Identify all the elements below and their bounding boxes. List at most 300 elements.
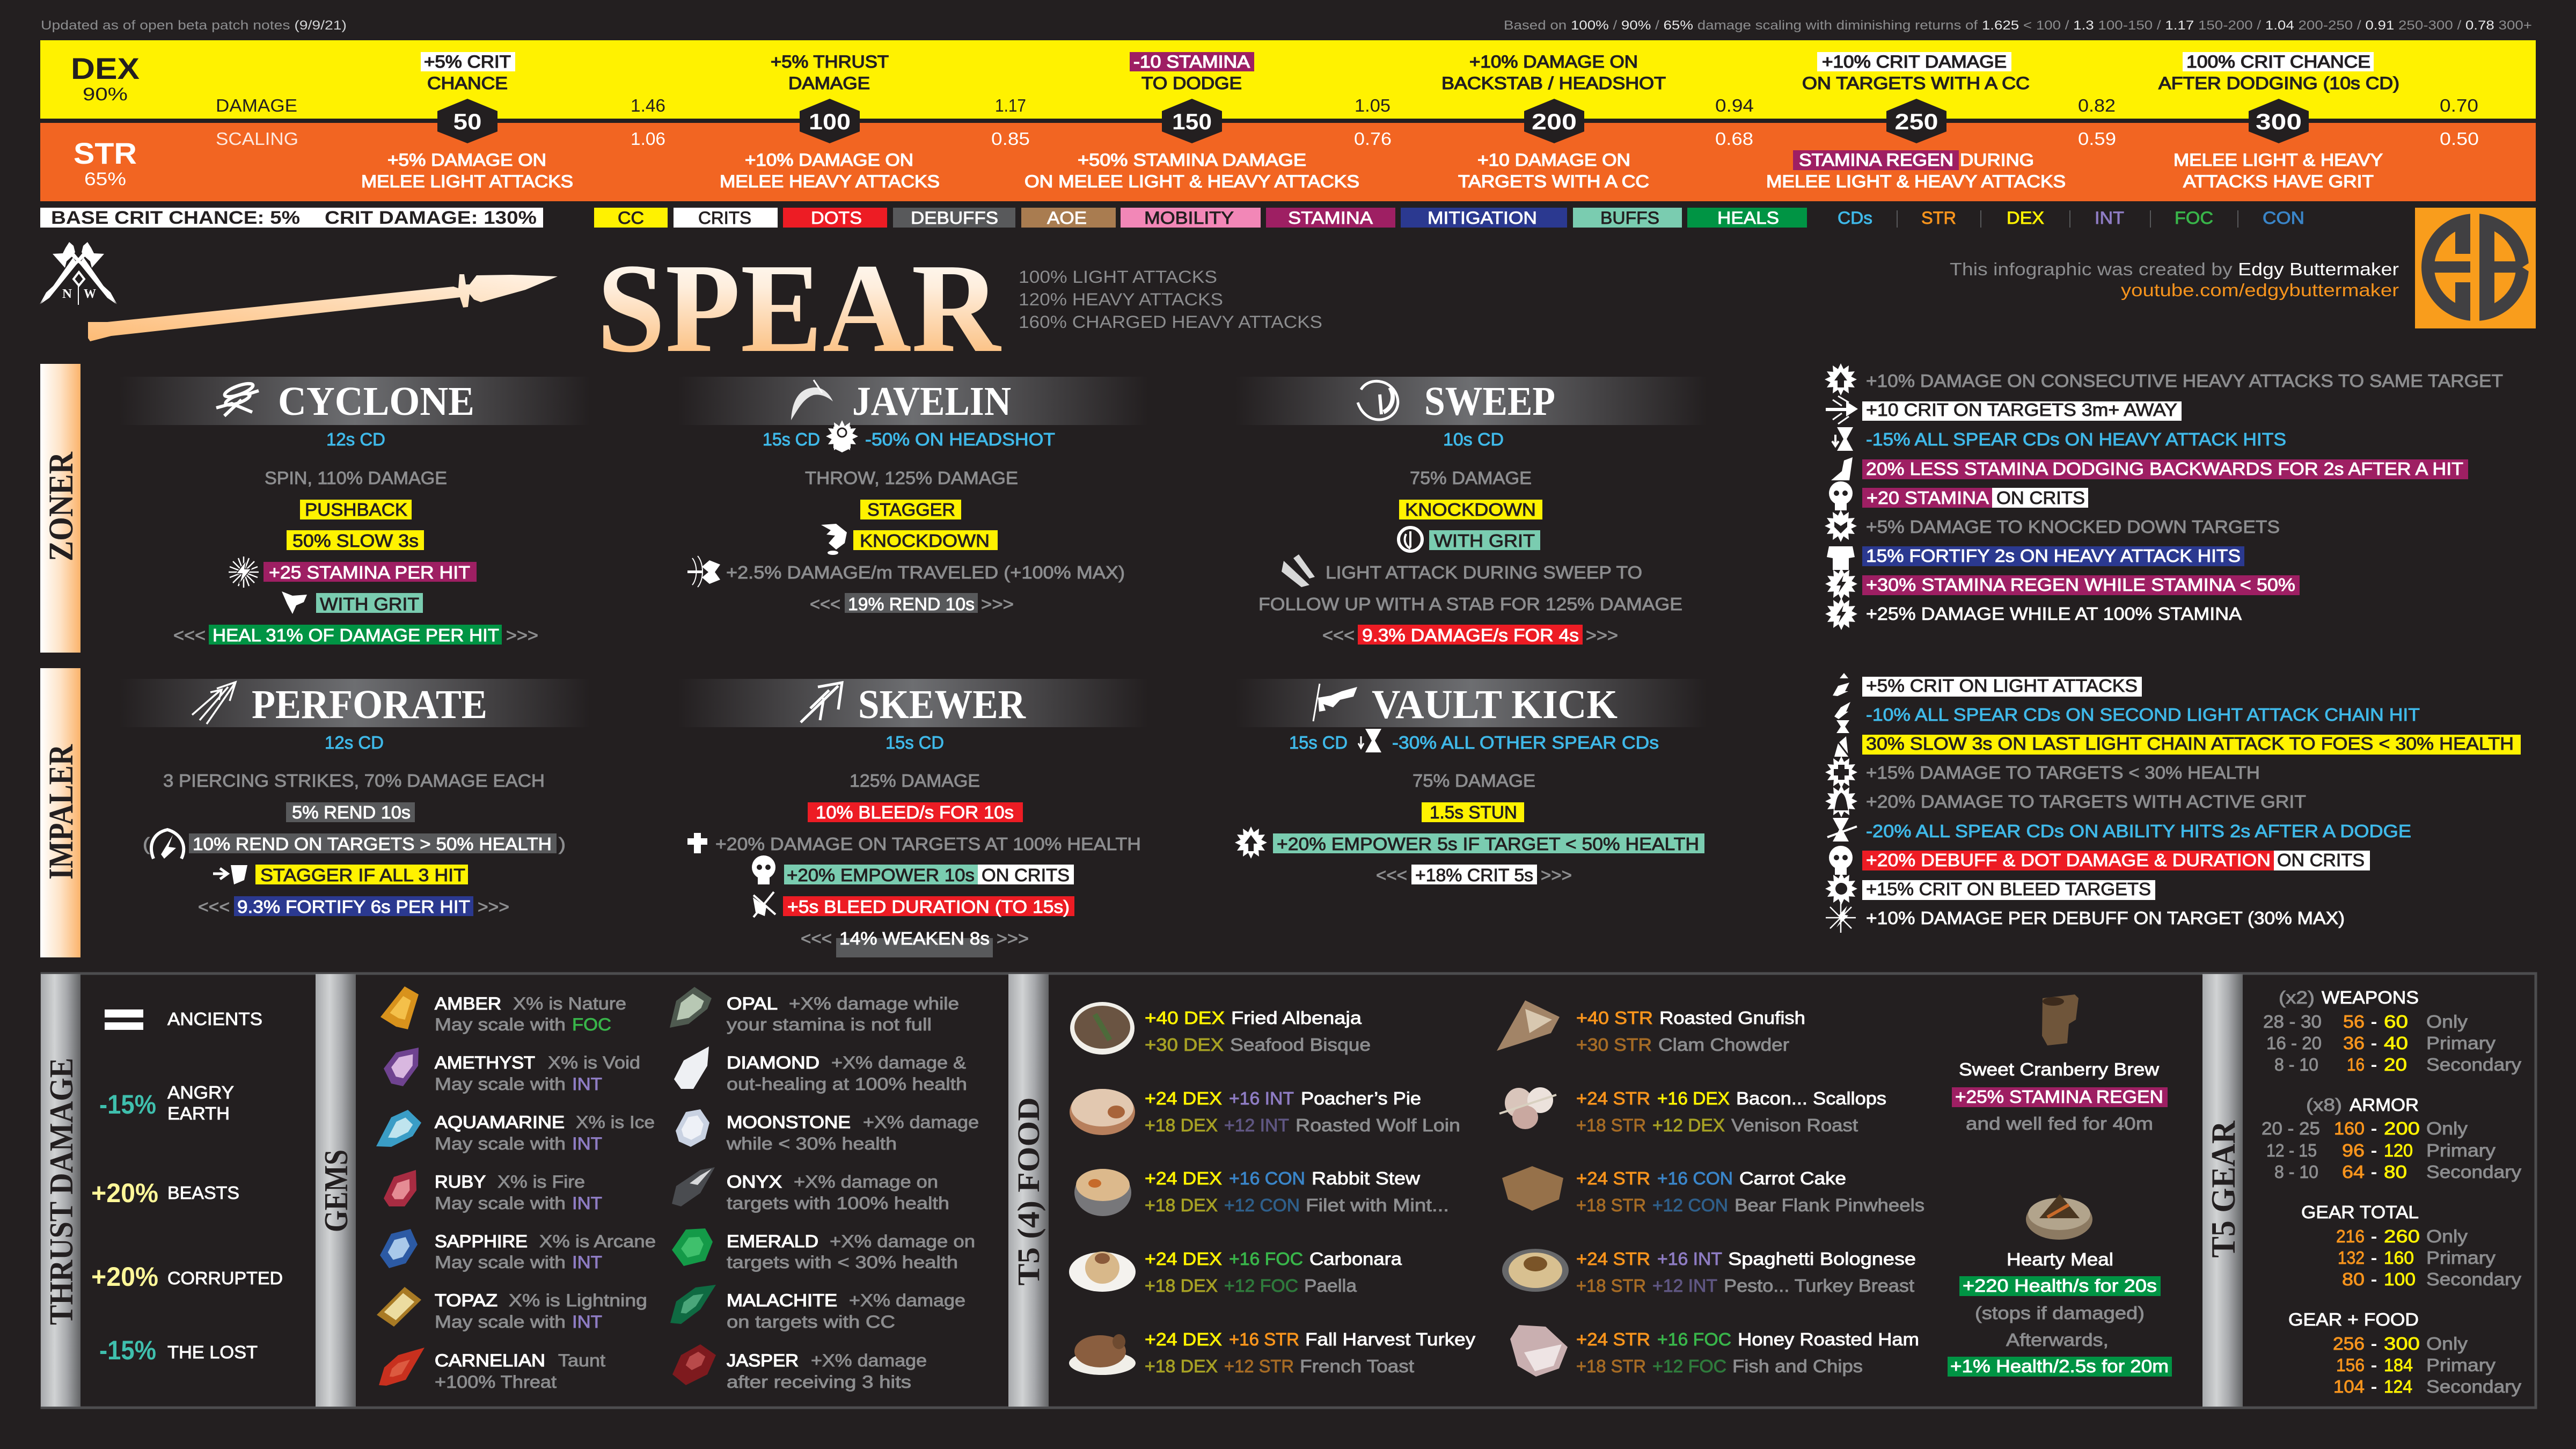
panel: gems [316, 974, 979, 1407]
threshold 300: 300 [2256, 109, 2302, 134]
panel: zoner passives [1825, 363, 2503, 630]
gem: topaz: X% is Lightning [509, 1291, 647, 1310]
passive row [1829, 481, 2088, 510]
gear plus food table: - [2371, 1355, 2377, 1375]
gear total table: - [2371, 1248, 2377, 1268]
side tab: zoner: ZONER [42, 451, 80, 561]
food row: str con: Bear Flank Pinwheels [1735, 1195, 1924, 1215]
gem: emerald [672, 1228, 975, 1272]
gem: sapphire: May scale with [435, 1253, 566, 1272]
food row: str foc: +16 FOC [1657, 1329, 1731, 1349]
gear plus food table: - [2371, 1334, 2377, 1353]
gem: amethyst: X% is Void [548, 1053, 640, 1072]
STR scaling values: 0.50 [2440, 129, 2479, 149]
passive row: -15% ALL SPEAR CDs ON HEAVY ATTACK HITS [1866, 429, 2286, 449]
tag: pushback: PUSHBACK [305, 500, 407, 519]
row: corrupted: CORRUPTED [167, 1268, 283, 1288]
drink: hearty meal: +1% Health/2.5s for 20m [1950, 1356, 2169, 1376]
STR scaling values: 0.59 [2078, 129, 2116, 149]
gem: opal: +X% damage while [789, 994, 959, 1013]
weapons table: 40 [2384, 1033, 2408, 1053]
weapons table: 20 [2384, 1055, 2407, 1074]
STR label: 65% [84, 169, 126, 189]
legend: effect colours: HEALS [1717, 208, 1779, 228]
heading: JAVELIN [852, 379, 1011, 424]
gear total table: 80 [2342, 1269, 2365, 1289]
food row: dex con: +16 CON [1229, 1168, 1305, 1188]
gear total table: 260 [2384, 1226, 2420, 1246]
upgrade: empower: +20% EMPOWER 5s IF TARGET < 50% HEALTH [1277, 834, 1699, 854]
gem: jasper [672, 1344, 927, 1392]
threshold 200: +10 DAMAGE ON [1477, 150, 1630, 170]
armor table: (x8) [2306, 1095, 2342, 1115]
food row: str con: +12 CON [1652, 1195, 1728, 1215]
gem: moonstone: +X% damage [863, 1113, 979, 1132]
gem: aquamarine: AQUAMARINE [435, 1113, 565, 1132]
food row: str dex [1499, 1087, 1886, 1135]
food row: dex str: French Toast [1300, 1356, 1414, 1376]
passive: rend [810, 593, 1014, 614]
gem: ruby [384, 1170, 602, 1213]
legend: effect colours [594, 208, 1807, 228]
DEX band [40, 40, 2536, 119]
drink: hearty meal: Hearty Meal [2007, 1249, 2113, 1269]
upgrade: with grit [1399, 528, 1540, 551]
gem: ruby: May scale with [435, 1194, 566, 1213]
gem: emerald: EMERALD [727, 1232, 818, 1251]
weapons table: Primary [2426, 1033, 2496, 1053]
upgrade: stamina per hit: +25 STAMINA PER HIT [269, 562, 470, 582]
passive: heal per hit: HEAL 31% OF DAMAGE PER HIT [213, 625, 499, 645]
threshold 250: MELEE LIGHT & HEAVY ATTACKS [1766, 172, 2066, 191]
gem: diamond: +X% damage & [831, 1053, 966, 1072]
heading: VAULT KICK [1372, 682, 1618, 727]
threshold 50: +5% DAMAGE ON [387, 150, 546, 170]
food row: str foc: +24 STR [1576, 1329, 1650, 1349]
threshold 150: ON MELEE LIGHT & HEAVY ATTACKS [1024, 172, 1359, 191]
passive row [1834, 702, 2420, 733]
panel: skewer [678, 679, 1148, 957]
row: angry earth: EARTH [167, 1103, 230, 1123]
legend: attribute colours [1838, 208, 2304, 228]
row: angry earth: -15% [99, 1089, 156, 1119]
cooldown: 12s CD [325, 733, 384, 752]
food row: str int: +16 INT [1657, 1249, 1722, 1269]
gem: moonstone [676, 1109, 979, 1153]
passive row: +20 STAMINA [1867, 488, 1989, 508]
heading [1235, 377, 1707, 425]
armor table: 200 [2384, 1118, 2420, 1138]
food row: str con: +16 CON [1657, 1168, 1733, 1188]
passive row [1825, 598, 2242, 630]
food row: str dex: +12 DEX [1652, 1115, 1725, 1135]
weapons table: - [2371, 1012, 2377, 1031]
DEX scaling values: 0.94 [1715, 96, 1754, 115]
legend: attribute colours: DEX [2007, 208, 2044, 228]
food row: dex con: Rabbit Stew [1312, 1168, 1420, 1188]
threshold 100 [720, 52, 940, 191]
gem: malachite: +X% damage [849, 1291, 965, 1310]
passive row [1825, 756, 2260, 788]
passive row: +10% DAMAGE ON CONSECUTIVE HEAVY ATTACKS TO SAME TARGET [1866, 371, 2503, 391]
passive row: +5% DAMAGE TO KNOCKED DOWN TARGETS [1866, 517, 2280, 537]
row: the lost [99, 1335, 258, 1365]
threshold 50 [361, 52, 573, 191]
gear total table: GEAR TOTAL [2301, 1202, 2419, 1222]
threshold 50: +5% CRIT [424, 52, 511, 71]
upgrade: empower on crits: ON CRITS [982, 865, 1070, 885]
heading [678, 679, 1148, 727]
upgrade: empower [1235, 826, 1704, 859]
gem: sapphire: INT [572, 1253, 602, 1272]
side tab: zoner [40, 364, 80, 653]
gear plus food table: 104 [2333, 1377, 2365, 1396]
upgrade: follow up stab: LIGHT ATTACK DURING SWEEP TO [1326, 562, 1642, 582]
tag: rend: 5% REND 10s [292, 802, 411, 822]
base crit stats: BASE CRIT CHANCE: 5% [51, 208, 300, 228]
passive row: +10 CRIT ON TARGETS 3m+ AWAY [1866, 400, 2177, 420]
upgrade: rend on healthy targets: ( [143, 834, 150, 854]
passive row [1826, 903, 2345, 933]
header note: patch date: Updated as of open beta patch notes (9/9/21) [41, 18, 347, 33]
food row: dex str: +16 STR [1229, 1329, 1299, 1349]
threshold 150 [1024, 52, 1359, 191]
passive: damage over time [1322, 625, 1618, 645]
row: beasts: +20% [91, 1178, 158, 1208]
DEX label [71, 52, 140, 105]
threshold 100: MELEE HEAVY ATTACKS [720, 172, 940, 191]
icon: cyclone swirl [216, 381, 259, 416]
passive row: -10% ALL SPEAR CDs ON SECOND LIGHT ATTACK CHAIN HIT [1866, 705, 2420, 724]
passive: damage over time: >>> [1586, 625, 1618, 645]
food row: str dex: +18 STR [1576, 1115, 1646, 1135]
threshold 250: 250 [1894, 109, 1938, 134]
gem: moonstone: while < 30% health [726, 1134, 897, 1153]
armor table: 12 - 15 [2266, 1140, 2317, 1160]
DEX label: DEX [71, 52, 140, 85]
gem: aquamarine: X% is Ice [576, 1113, 655, 1132]
threshold 200: BACKSTAB / HEADSHOT [1441, 74, 1666, 93]
legend: attribute colours: CDs [1838, 208, 1872, 228]
icon: hourglass [1358, 729, 1381, 752]
food row: dex foc: Paella [1304, 1276, 1357, 1296]
gem: onyx: +X% damage on [794, 1172, 938, 1191]
heading [119, 679, 590, 727]
gem: malachite [670, 1285, 965, 1331]
passive row: ON CRITS [2277, 850, 2365, 870]
description: THROW, 125% DAMAGE [805, 468, 1018, 488]
passive row: +5% CRIT ON LIGHT ATTACKS [1866, 676, 2138, 696]
food row: dex foc [1069, 1249, 1402, 1296]
gear plus food table: 124 [2384, 1377, 2412, 1396]
food row: str: +30 STR [1576, 1035, 1652, 1055]
armor table: 160 [2334, 1118, 2365, 1138]
threshold 150: +50% STAMINA DAMAGE [1078, 150, 1306, 170]
STR scaling values: 0.68 [1715, 129, 1753, 149]
threshold 50: 50 [453, 109, 482, 134]
armor table: 64 [2342, 1162, 2365, 1182]
icon: javelin arc [791, 380, 833, 420]
food row: str dex: Bacon... Scallops [1736, 1088, 1886, 1108]
gem: ruby: INT [572, 1194, 602, 1213]
weapons table: 16 - 20 [2266, 1033, 2322, 1053]
armor table: Secondary [2426, 1162, 2522, 1182]
row: ancients: ANCIENTS [167, 1009, 262, 1029]
title: SPEAR: SPEAR [597, 238, 1001, 379]
legend: effect colours: DEBUFFS [911, 208, 998, 228]
passive row [1825, 568, 2300, 600]
panel: bottom reference frame [42, 974, 2536, 1408]
upgrade: with grit: WITH GRIT [320, 594, 419, 614]
passive row [1825, 363, 2503, 396]
threshold 50: MELEE LIGHT ATTACKS [361, 172, 573, 191]
gem: ruby: X% is Fire [497, 1172, 585, 1191]
threshold 250: STAMINA REGEN [1799, 150, 1953, 170]
panel: thrust damage [41, 974, 283, 1407]
food row: dex con: +12 CON [1224, 1195, 1300, 1215]
base crit stats: CRIT DAMAGE: 130% [325, 208, 537, 228]
legend: attribute colours: FOC [2175, 208, 2213, 228]
icon: New World logo: N [62, 287, 72, 301]
row: the lost: -15% [99, 1335, 156, 1365]
gem: carnelian [379, 1348, 605, 1392]
STR label: STR [74, 136, 137, 170]
tag: stun: 1.5s STUN [1430, 802, 1517, 822]
food row: str foc: +18 STR [1576, 1356, 1646, 1376]
threshold 50: CHANCE [427, 74, 508, 93]
gem: amber [380, 986, 626, 1034]
panel: cyclone [119, 377, 590, 645]
food row: str foc: Fish and Chips [1732, 1356, 1863, 1376]
passive: rend: <<< [810, 594, 840, 614]
weapons table: 16 [2347, 1055, 2365, 1074]
passive row: +25% DAMAGE WHILE AT 100% STAMINA [1866, 604, 2242, 624]
food row: str int [1502, 1249, 1916, 1296]
gear plus food table: Secondary [2426, 1377, 2522, 1396]
threshold 300: ATTACKS HAVE GRIT [2183, 172, 2374, 191]
drink: hearty meal [1948, 1194, 2172, 1377]
icon: skewer arrow [801, 683, 842, 722]
heading: SWEEP [1424, 379, 1555, 424]
legend: effect colours: DOTS [811, 208, 862, 228]
heading: PERFORATE [252, 682, 487, 727]
food row: dex: Seafood Bisque [1230, 1035, 1371, 1055]
icon: vault kick figure [1313, 684, 1357, 721]
food row: str dex: +24 STR [1576, 1088, 1650, 1108]
food row: dex str: +12 STR [1224, 1356, 1294, 1376]
gem: jasper: +X% damage [811, 1351, 927, 1370]
food row: str con: +18 STR [1576, 1195, 1646, 1215]
credit [1950, 259, 2399, 300]
gem: sapphire: SAPPHIRE [435, 1232, 528, 1251]
gem: topaz: INT [572, 1312, 602, 1331]
upgrade: knockdown [821, 524, 998, 555]
upgrade: empower on crits: +20% EMPOWER 10s [787, 865, 975, 885]
food row: str: +40 STR [1576, 1008, 1653, 1028]
passive row: 20% LESS STAMINA DODGING BACKWARDS FOR 2s AFTER A HIT [1866, 459, 2463, 479]
attack multipliers: 100% LIGHT ATTACKS [1019, 267, 1217, 287]
upgrade: empower on crits [752, 855, 1074, 885]
gem: amethyst: May scale with [435, 1074, 566, 1094]
side tab: T5 (4) FOOD [1011, 1097, 1046, 1286]
passive: crit [1376, 865, 1572, 885]
icon: New World logo: W [84, 287, 96, 301]
gem: amber: May scale with [435, 1015, 566, 1034]
legend: effect colours: STAMINA [1288, 208, 1373, 228]
threshold 150: 150 [1172, 109, 1212, 134]
gear total table: Secondary [2426, 1269, 2522, 1289]
legend: effect colours: CRITS [698, 208, 751, 228]
upgrade: stamina per hit [229, 557, 477, 588]
gear total table: - [2371, 1226, 2377, 1246]
DEX scaling values [631, 96, 2478, 115]
gem: amber: AMBER [435, 994, 501, 1013]
armor table: Only [2426, 1118, 2468, 1138]
gem: moonstone: MOONSTONE [727, 1113, 851, 1132]
passive row: +10% DAMAGE PER DEBUFF ON TARGET (30% MAX) [1866, 908, 2345, 928]
icon: sweep arc [1358, 381, 1398, 420]
gear plus food table [2288, 1309, 2522, 1396]
row: corrupted: +20% [91, 1262, 158, 1292]
gem: amber: X% is Nature [513, 994, 626, 1013]
description: SPIN, 110% DAMAGE [265, 468, 447, 488]
food row: str foc: Honey Roasted Ham [1738, 1329, 1919, 1349]
icon: spear silhouette [88, 274, 558, 341]
food row: str con: +24 STR [1576, 1168, 1650, 1188]
gear plus food table: - [2371, 1377, 2377, 1396]
food row: dex foc: +18 DEX [1145, 1276, 1218, 1296]
row: the lost: THE LOST [167, 1342, 258, 1362]
passive row: +15% CRIT ON BLEED TARGETS [1866, 879, 2151, 899]
weapons table: Only [2426, 1012, 2468, 1031]
threshold 150: TO DODGE [1141, 74, 1242, 93]
armor table: - [2371, 1162, 2377, 1182]
threshold 200: 200 [1532, 109, 1577, 134]
food row: dex int: Poacher’s Pie [1301, 1088, 1421, 1108]
armor table: Primary [2426, 1140, 2496, 1160]
gem: jasper: after receiving 3 hits [727, 1372, 911, 1392]
legend: effect colours: MOBILITY [1144, 208, 1234, 228]
gem: opal: your stamina is not full [727, 1015, 932, 1034]
gear total table: 160 [2384, 1248, 2414, 1268]
gem: jasper: JASPER [727, 1351, 799, 1370]
side tab [41, 974, 80, 1407]
upgrade: rend on healthy targets: ) [559, 834, 566, 854]
gem: carnelian: +100% Threat [435, 1372, 557, 1392]
icon: triple strike [192, 682, 236, 724]
threshold 250: DURING [1960, 150, 2034, 170]
gem: carnelian: Taunt [558, 1351, 605, 1370]
food row: str int: Pesto... Turkey Breast [1724, 1276, 1914, 1296]
attack multipliers [1019, 267, 1322, 332]
food row: dex str: Fall Harvest Turkey [1305, 1329, 1476, 1349]
threshold 200 [1441, 52, 1666, 191]
legend: effect colours: CC [618, 208, 644, 228]
gem: diamond [674, 1046, 967, 1094]
icon: EB logo [2415, 208, 2536, 328]
upgrade: damage per metre [687, 556, 1125, 587]
threshold 300: MELEE LIGHT & HEAVY [2174, 150, 2383, 170]
drink: hearty meal: +220 Health/s for 20s [1963, 1276, 2157, 1296]
food row: dex foc: Carbonara [1309, 1249, 1402, 1269]
credit: This infographic was created by Edgy Buttermaker [1950, 259, 2399, 279]
credit: youtube.com/edgybuttermaker [2121, 280, 2399, 300]
gem: malachite: MALACHITE [727, 1291, 837, 1310]
food row: str con [1502, 1166, 1924, 1215]
legend: effect colours: MITIGATION [1428, 208, 1537, 228]
gem: aquamarine [376, 1110, 655, 1153]
gem: onyx [672, 1167, 949, 1213]
passive row: 30% SLOW 3s ON LAST LIGHT CHAIN ATTACK TO FOES < 30% HEALTH [1866, 734, 2514, 753]
tag: knockdown: KNOCKDOWN [1405, 500, 1536, 519]
gear plus food table: GEAR + FOOD [2288, 1309, 2419, 1329]
threshold 150: -10 STAMINA [1133, 52, 1250, 71]
passive row [1829, 846, 2370, 875]
upgrade: bleed duration: +5s BLEED DURATION (TO 15s) [787, 897, 1070, 917]
gear total table: 132 [2338, 1248, 2365, 1268]
passive row: +30% STAMINA REGEN WHILE STAMINA < 50% [1866, 575, 2295, 595]
weapons table: - [2371, 1055, 2377, 1074]
cooldown: 10s CD [1443, 429, 1504, 449]
passive: crit: >>> [1541, 865, 1572, 885]
DEX scaling values: 0.82 [2078, 96, 2116, 115]
side tab [316, 974, 356, 1407]
panel: javelin [678, 377, 1148, 614]
gem: ruby: RUBY [435, 1172, 486, 1191]
STR band [40, 123, 2536, 201]
panel: impaler passives [1825, 673, 2521, 933]
food row: str int: Spaghetti Bolognese [1728, 1249, 1916, 1269]
panel: attribute scaling bands [40, 40, 2536, 201]
scaling label: SCALING [216, 129, 298, 149]
drink: hearty meal: (stops if damaged) [1975, 1303, 2145, 1323]
armor table: 20 - 25 [2262, 1118, 2320, 1138]
passive: fortify: <<< [198, 897, 230, 917]
gem: topaz [377, 1287, 647, 1331]
passive row: +20% DEBUFF & DOT DAMAGE & DURATION [1866, 850, 2271, 870]
threshold 250 [1766, 52, 2066, 191]
row: beasts: BEASTS [167, 1183, 239, 1203]
food row: dex con [1074, 1168, 1449, 1216]
base crit stats [40, 208, 543, 228]
food row: str foc [1510, 1325, 1919, 1377]
food row: dex foc: +16 FOC [1229, 1249, 1303, 1269]
row: angry earth [99, 1082, 234, 1123]
description: 75% DAMAGE [1413, 771, 1535, 791]
drink: sweet cranberry brew: +25% STAMINA REGEN [1955, 1087, 2163, 1107]
threshold 300 [2158, 52, 2399, 191]
food row: dex int: +24 DEX [1145, 1088, 1222, 1108]
passive row [1825, 510, 2280, 542]
gear plus food table: 256 [2333, 1334, 2365, 1353]
gear total table: Primary [2426, 1248, 2496, 1268]
weapons table: 56 [2343, 1012, 2365, 1031]
gem: emerald: targets with < 30% health [727, 1253, 958, 1272]
food row: dex str: +24 DEX [1145, 1329, 1222, 1349]
gear total table: 100 [2384, 1269, 2416, 1289]
gem: carnelian: CARNELIAN [435, 1351, 545, 1370]
armor table: 8 - 10 [2274, 1162, 2318, 1182]
passive: crit: <<< [1376, 865, 1407, 885]
DEX scaling values: 1.46 [631, 96, 665, 115]
upgrade: with grit [282, 591, 423, 614]
food row: dex int: +18 DEX [1145, 1115, 1218, 1135]
food row: dex str [1069, 1329, 1476, 1376]
gear plus food table: Primary [2426, 1355, 2496, 1375]
food row: str con: Carrot Cake [1739, 1168, 1846, 1188]
weapons table: WEAPONS [2322, 987, 2419, 1007]
gem: amethyst: INT [572, 1074, 602, 1094]
